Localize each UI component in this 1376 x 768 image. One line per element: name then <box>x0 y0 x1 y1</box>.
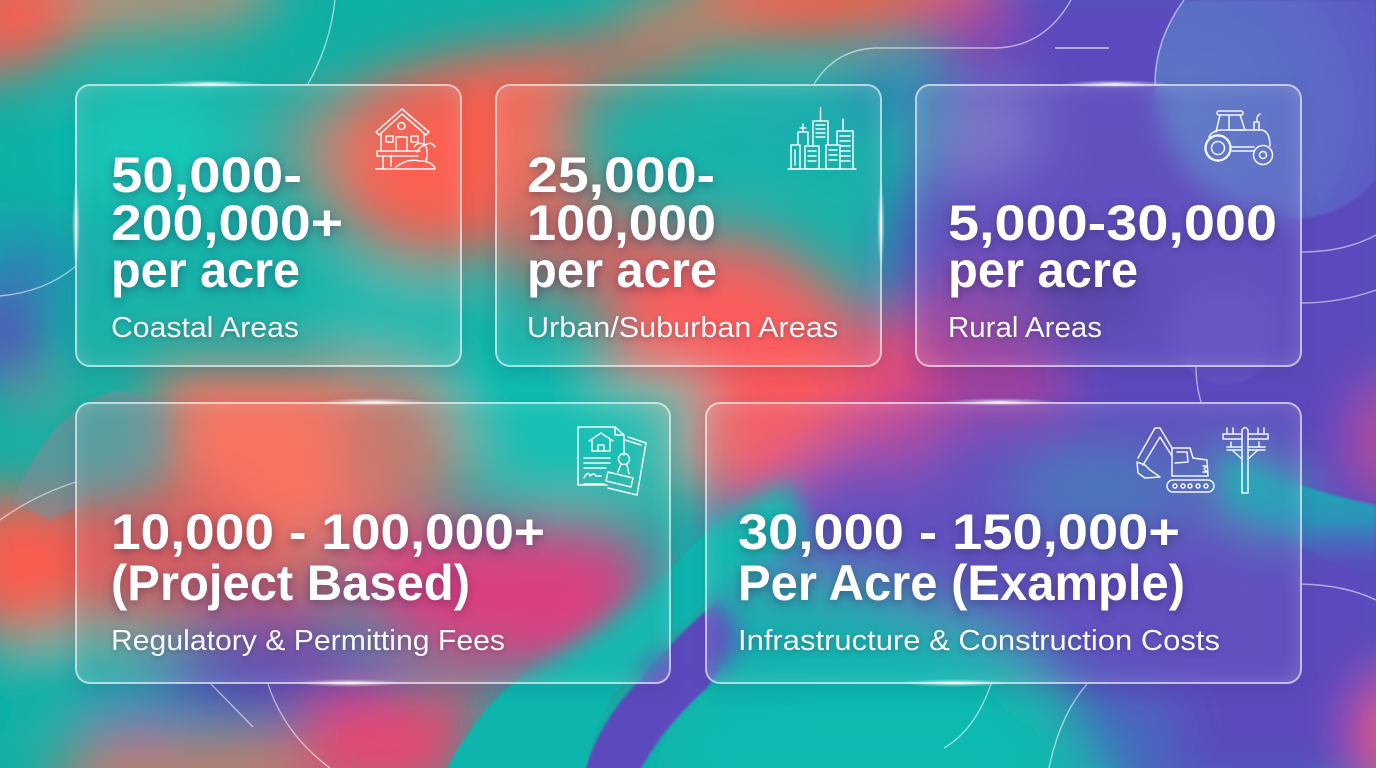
value: 10,000 - 100,000+ (project based): 10,000 - 100,000+ <box>111 504 545 560</box>
value: 5,000-30,000 per acre: 5,000-30,000 <box>948 195 1277 251</box>
left blob and red <box>150 368 400 560</box>
right side pink <box>1360 385 1376 495</box>
value: 5,000-30,000 per acre: per acre <box>948 242 1138 298</box>
panel: infrastructure and construction costs <box>705 402 1302 684</box>
icon: beach house <box>376 109 435 169</box>
value: 30,000 - 150,000+ per acre (example): Per Acre (Example) <box>738 555 1185 611</box>
purple right mass <box>720 0 1376 768</box>
magenta <box>330 519 650 685</box>
value: 50,000-200,000+ per acre: per acre <box>111 242 300 298</box>
value: 50,000-200,000+ per acre <box>111 147 343 298</box>
panel: urban/suburban areas <box>495 84 882 367</box>
panel: regulatory and permitting fees <box>75 402 671 684</box>
value: 25,000-100,000 per acre: 25,000- <box>527 147 715 203</box>
card 2 salmon and red <box>490 95 590 255</box>
value: 30,000 - 150,000+ per acre (example) <box>738 504 1185 611</box>
card 5 tints <box>690 372 895 510</box>
label: rural areas: Rural Areas <box>948 312 1102 344</box>
top red band <box>690 0 990 45</box>
bottom teal <box>640 664 1110 768</box>
value: 10,000 - 100,000+ (project based): (Project Based) <box>111 555 470 611</box>
teal overlays <box>430 372 705 495</box>
value: 10,000 - 100,000+ (project based) <box>111 504 545 611</box>
value: 5,000-30,000 per acre <box>948 195 1277 298</box>
icon: city buildings <box>788 108 856 169</box>
lower purple and bottom <box>155 638 405 722</box>
gutter magenta <box>920 345 1060 410</box>
panel: coastal areas <box>75 84 462 367</box>
left edge blue <box>0 233 75 297</box>
panel: rural areas <box>915 84 1302 367</box>
label: infrastructure and construction costs: Infrastructure & Construction Costs <box>738 625 1220 657</box>
center red <box>325 34 690 262</box>
value: 25,000-100,000 per acre <box>527 147 717 298</box>
label: coastal areas: Coastal Areas <box>111 312 299 344</box>
icon: permit documents and stamp <box>578 427 646 495</box>
top left red corner <box>0 0 90 80</box>
value: 25,000-100,000 per acre: per acre <box>527 242 717 298</box>
label: regulatory and permitting fees: Regulatory & Permitting Fees <box>111 625 505 657</box>
value: 25,000-100,000 per acre: 100,000 <box>527 195 716 251</box>
label: urban/suburban areas: Urban/Suburban Areas <box>527 312 838 344</box>
icon: tractor <box>1206 111 1272 164</box>
card 3 tints <box>925 90 1040 185</box>
icon: utility pole <box>1223 428 1268 493</box>
value: 50,000-200,000+ per acre: 50,000- <box>111 147 302 203</box>
value: 50,000-200,000+ per acre: 200,000+ <box>111 195 343 251</box>
value: 30,000 - 150,000+ per acre (example): 30,000 - 150,000+ <box>738 504 1180 560</box>
icon: excavator <box>1137 428 1214 492</box>
